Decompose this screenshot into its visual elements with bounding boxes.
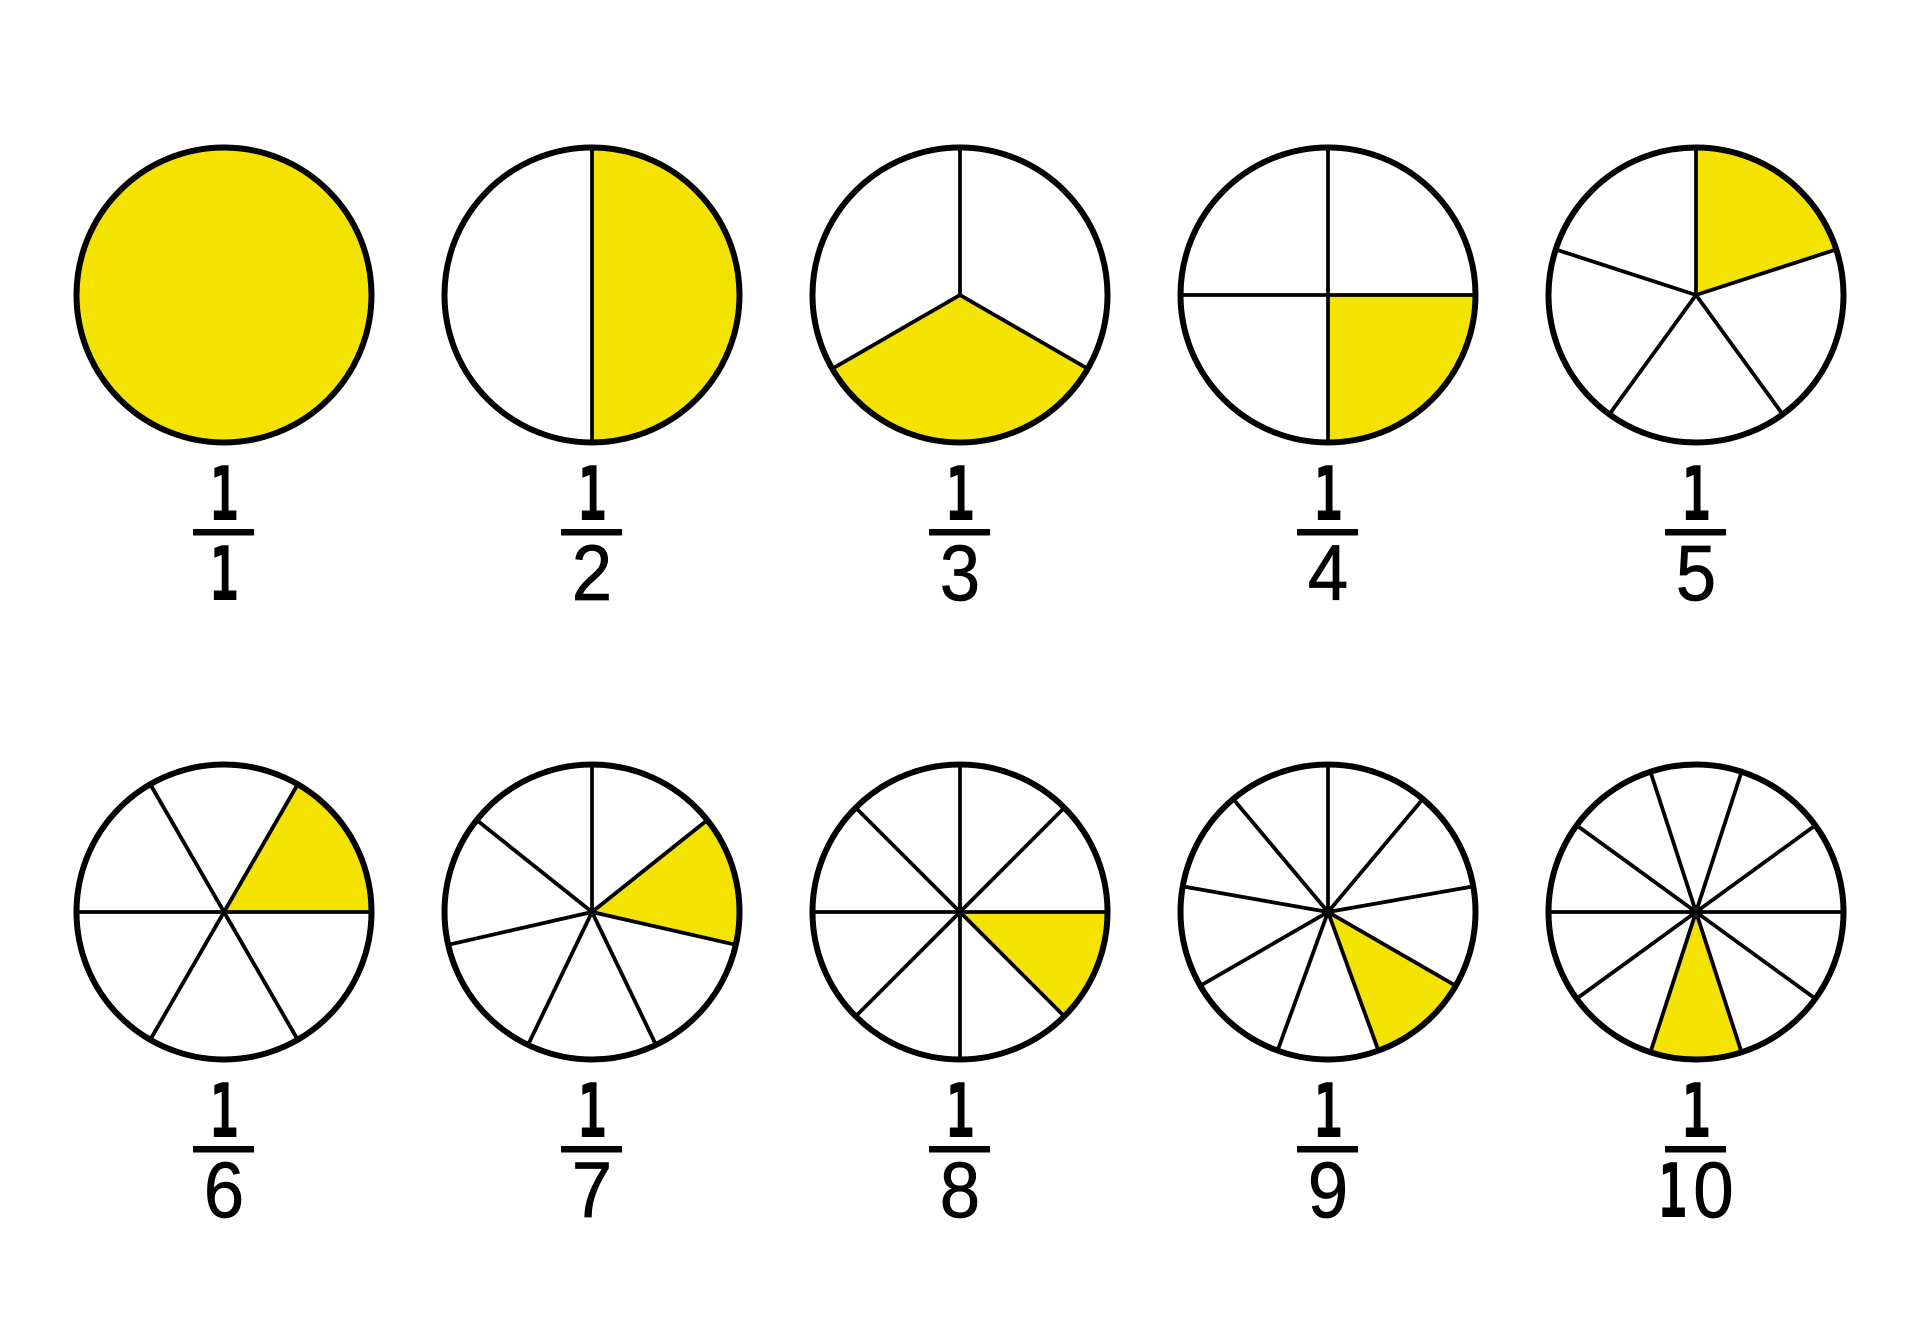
label: 1/8 [929, 1067, 990, 1235]
label: 1/4: 4 [1308, 529, 1348, 618]
base circle [1180, 764, 1476, 1060]
spokes [76, 784, 372, 1040]
circle outline [444, 148, 740, 442]
label: 1/10 [1658, 1067, 1734, 1235]
base circle [444, 148, 740, 442]
label: 1/4 [1297, 450, 1358, 618]
fraction diagram: 1/3 [812, 148, 1108, 618]
circle outline [1180, 764, 1476, 1060]
fraction diagram: 1/5 [1548, 148, 1844, 618]
label: 1/2: 1 [577, 450, 607, 538]
fraction diagram: 1/10 [1548, 764, 1844, 1235]
label: 1/9: 1 [1313, 1067, 1343, 1155]
circle outline [1548, 148, 1844, 442]
spokes [1183, 764, 1473, 1051]
label: 1/8: 1 [945, 1067, 975, 1155]
label: 1/5: 1 [1681, 450, 1711, 538]
label: 1/2: 2 [572, 529, 612, 618]
label: 1/5 [1665, 450, 1726, 618]
fraction diagram: 1/2 [444, 148, 740, 618]
yellow sector [224, 784, 408, 976]
label: 1/3 [929, 450, 990, 618]
circle outline [76, 148, 372, 442]
label: 1/9 [1297, 1067, 1358, 1235]
yellow sector [592, 820, 779, 1002]
yellow sector [592, 148, 740, 442]
spokes [448, 764, 736, 1045]
label: 1/4: 1 [1313, 450, 1343, 538]
fraction diagram: 1/7 [444, 764, 779, 1235]
base circle [1180, 148, 1476, 442]
circle outline [1548, 764, 1844, 1060]
label: 1/5: 5 [1676, 529, 1716, 618]
label: 1/2 [561, 450, 622, 618]
spokes [590, 148, 594, 442]
base circle [812, 764, 1108, 1060]
label: 1/3: 1 [945, 450, 975, 538]
base circle [444, 764, 740, 1060]
base circle [76, 764, 372, 1060]
yellow full circle [76, 148, 372, 442]
fraction diagram: 1/4 [1180, 148, 1476, 618]
label: 1/6: 1 [209, 1067, 239, 1155]
circle outline [76, 764, 372, 1060]
spokes [1556, 148, 1836, 414]
yellow sector [822, 258, 1088, 496]
label: 1/3: 3 [940, 529, 980, 618]
label: 1/6: 6 [204, 1146, 244, 1235]
spokes [1180, 148, 1476, 442]
spokes [832, 148, 1088, 369]
circle outline [1180, 148, 1476, 442]
yellow sector [1614, 912, 1742, 1079]
base circle [812, 148, 1108, 442]
label: 1/10: 1 [1658, 1147, 1687, 1235]
fraction diagram: 1/6 [76, 764, 408, 1235]
label: 1/1: 1 [209, 530, 239, 618]
label: 1/1 [193, 450, 254, 618]
yellow sector [1328, 295, 1476, 442]
label: 1/7: 1 [577, 1067, 607, 1155]
circle outline [444, 764, 740, 1060]
circle outline [812, 148, 1108, 442]
label: 1/7: 7 [572, 1146, 612, 1235]
fraction diagram: 1/8 [812, 764, 1108, 1235]
label: 1/10: 0 [1693, 1146, 1734, 1235]
label: 1/9: 9 [1308, 1146, 1348, 1235]
base circle [1548, 764, 1844, 1060]
circle outline [812, 764, 1108, 1060]
label: 1/1: 1 [209, 450, 239, 538]
label: 1/7 [561, 1067, 622, 1235]
yellow sector [960, 912, 1108, 1016]
yellow sector [1281, 912, 1456, 1068]
fraction diagram: 1/9 [1180, 764, 1476, 1235]
spokes [1548, 772, 1844, 1052]
label: 1/10: 1 [1681, 1067, 1711, 1155]
spokes [812, 764, 1108, 1060]
label: 1/6 [193, 1067, 254, 1235]
label: 1/8: 8 [940, 1146, 980, 1235]
fraction diagram: 1/1 [76, 148, 372, 618]
base circle [1548, 148, 1844, 442]
yellow sector [1696, 148, 1836, 295]
